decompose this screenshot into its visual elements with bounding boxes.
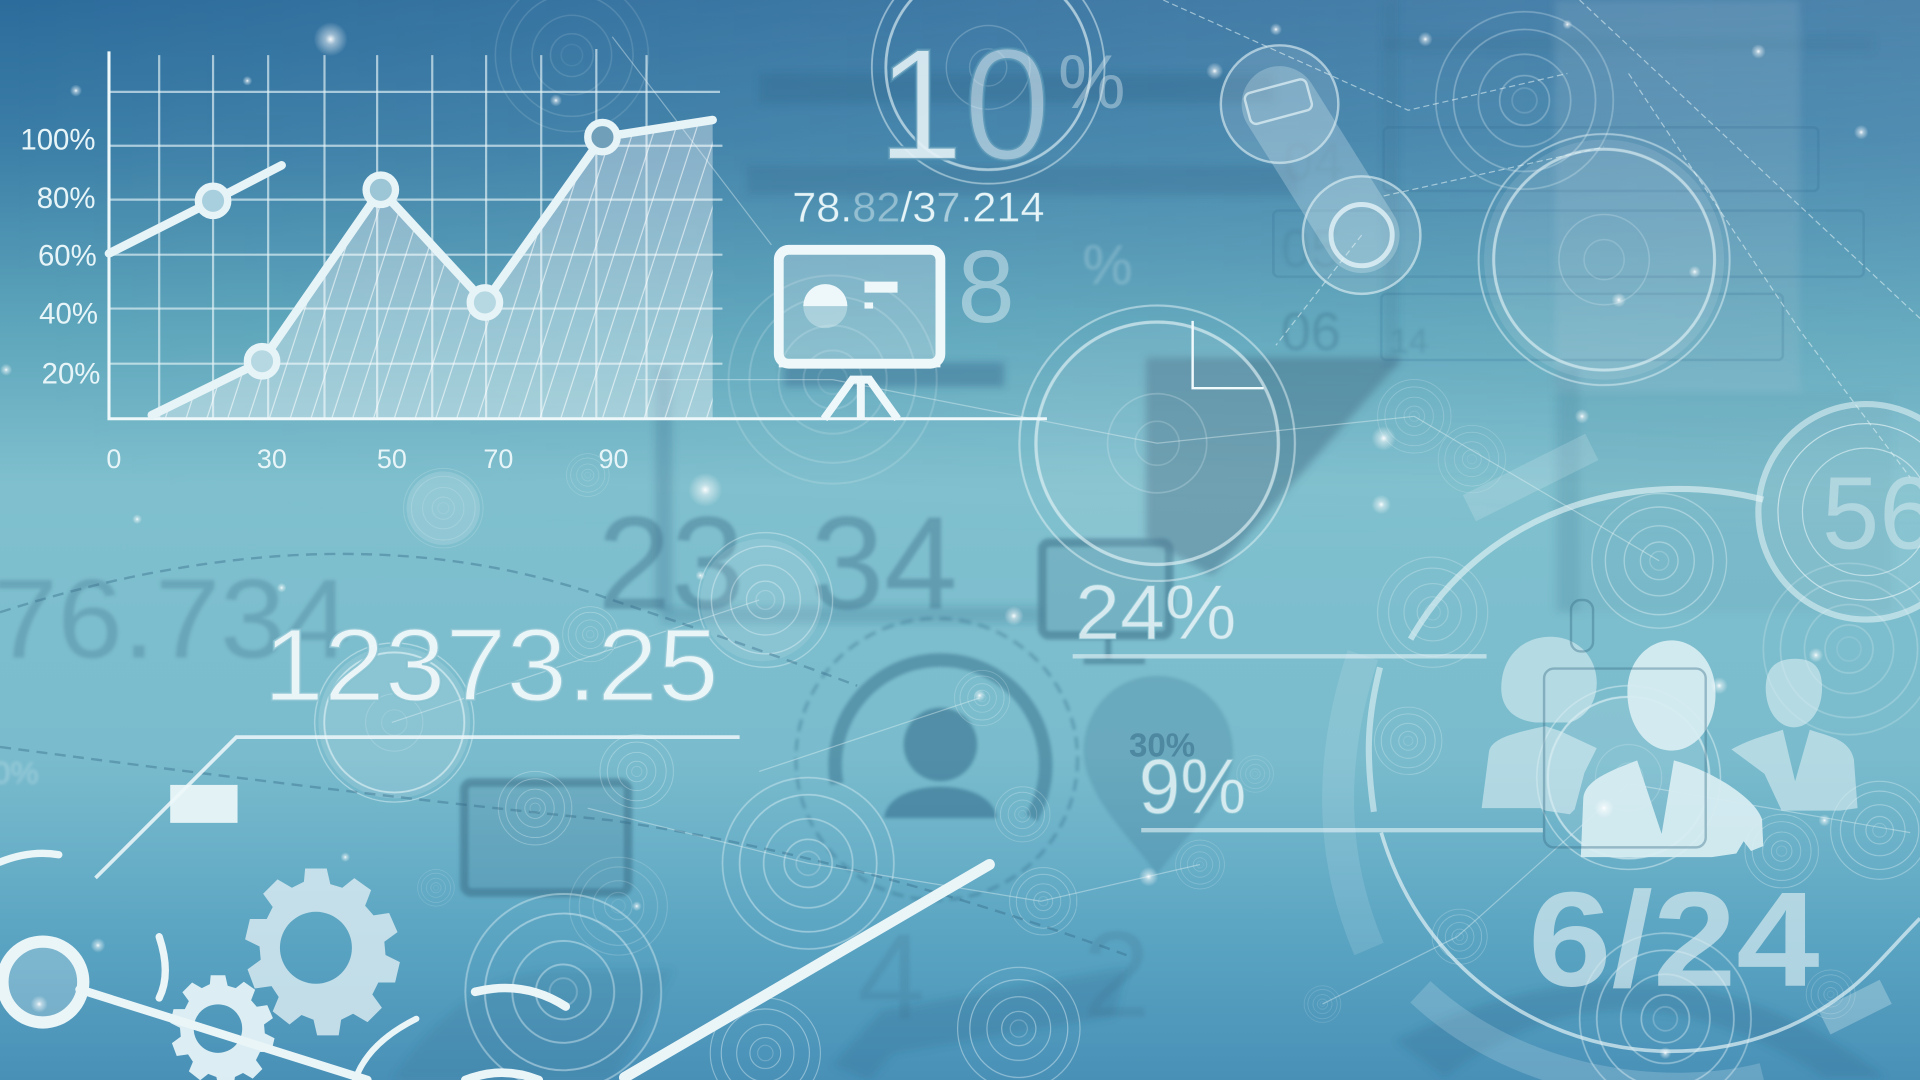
chart: x axis labels: 0 bbox=[106, 444, 121, 474]
ghost user avatar bbox=[796, 618, 1078, 900]
chart: upper short line bbox=[109, 165, 282, 253]
chart: y axis labels: 20% bbox=[42, 357, 100, 390]
chart: x axis labels: 70 bbox=[483, 444, 513, 474]
team icon bbox=[1482, 637, 1858, 857]
callout line with block bbox=[96, 737, 740, 878]
ghost numbers in background: % bbox=[1082, 233, 1133, 296]
chart: y axis labels: 80% bbox=[37, 182, 96, 215]
ghost numbers in background: 2 bbox=[1082, 905, 1151, 1042]
large dial bbox=[1338, 404, 1920, 1080]
glass discs bbox=[318, 140, 1920, 858]
small gear bbox=[170, 975, 275, 1080]
bottom-left line chart bbox=[0, 853, 989, 1080]
ghost numbers in background: 34 bbox=[811, 490, 958, 638]
big percent 10%: 10 bbox=[877, 15, 1051, 193]
chart: x axis labels bbox=[106, 444, 628, 474]
chart: y axis labels: 60% bbox=[38, 240, 97, 273]
ghost numbers in background: 76.734 bbox=[0, 556, 350, 682]
map pin ghost icon bbox=[1084, 676, 1233, 874]
ghost numbers in background bbox=[0, 132, 1428, 1045]
chart: y axis labels bbox=[20, 123, 100, 390]
ghost numbers in background: 23 bbox=[598, 490, 744, 638]
ghost numbers in background: 14 bbox=[1390, 323, 1428, 361]
chart: y axis labels: 40% bbox=[39, 297, 98, 330]
fraction 6/24: 6/24 bbox=[1528, 864, 1820, 1015]
map pin ghost icon: 30% bbox=[1129, 728, 1195, 765]
corner marker bbox=[1193, 321, 1264, 388]
ghost numbers in background: 05 bbox=[1281, 219, 1341, 279]
chain link blob top right bbox=[1221, 45, 1420, 294]
chart: area fill with hatching bbox=[152, 120, 713, 419]
ghost numbers in background: 06 bbox=[1281, 302, 1341, 362]
woman figure bbox=[1482, 637, 1597, 814]
main number 12373.25: 12373.25 bbox=[263, 607, 719, 722]
presentation board icon bbox=[779, 250, 940, 419]
chart: grid bbox=[110, 49, 722, 419]
chart: axes bbox=[109, 51, 1047, 419]
monitor ghost icons bbox=[464, 542, 1169, 893]
ghost numbers in background: 04 bbox=[1283, 132, 1343, 192]
ghost number 8: 8 bbox=[958, 229, 1015, 344]
large gear bbox=[245, 869, 400, 1035]
chart: x axis labels: 90 bbox=[598, 444, 628, 474]
blurred background panels bbox=[392, 0, 1892, 1080]
24% callout: 24% bbox=[1075, 568, 1237, 656]
id badge outline bbox=[1544, 600, 1706, 847]
man centre figure bbox=[1581, 640, 1763, 857]
chart: y axis labels: 100% bbox=[20, 123, 96, 156]
coordinates text: 78.82/37.214 bbox=[792, 184, 1044, 231]
ghost numbers in background: 4 bbox=[857, 908, 925, 1045]
chart: x axis labels: 30 bbox=[257, 444, 287, 474]
big percent 10%: % bbox=[1058, 40, 1125, 125]
9% callout: 9% bbox=[1139, 742, 1247, 830]
chart: x axis labels: 50 bbox=[377, 444, 407, 474]
chart: main line with markers bbox=[152, 120, 713, 415]
ghost outlined table boxes bbox=[1273, 127, 1864, 360]
man right figure bbox=[1731, 659, 1858, 811]
